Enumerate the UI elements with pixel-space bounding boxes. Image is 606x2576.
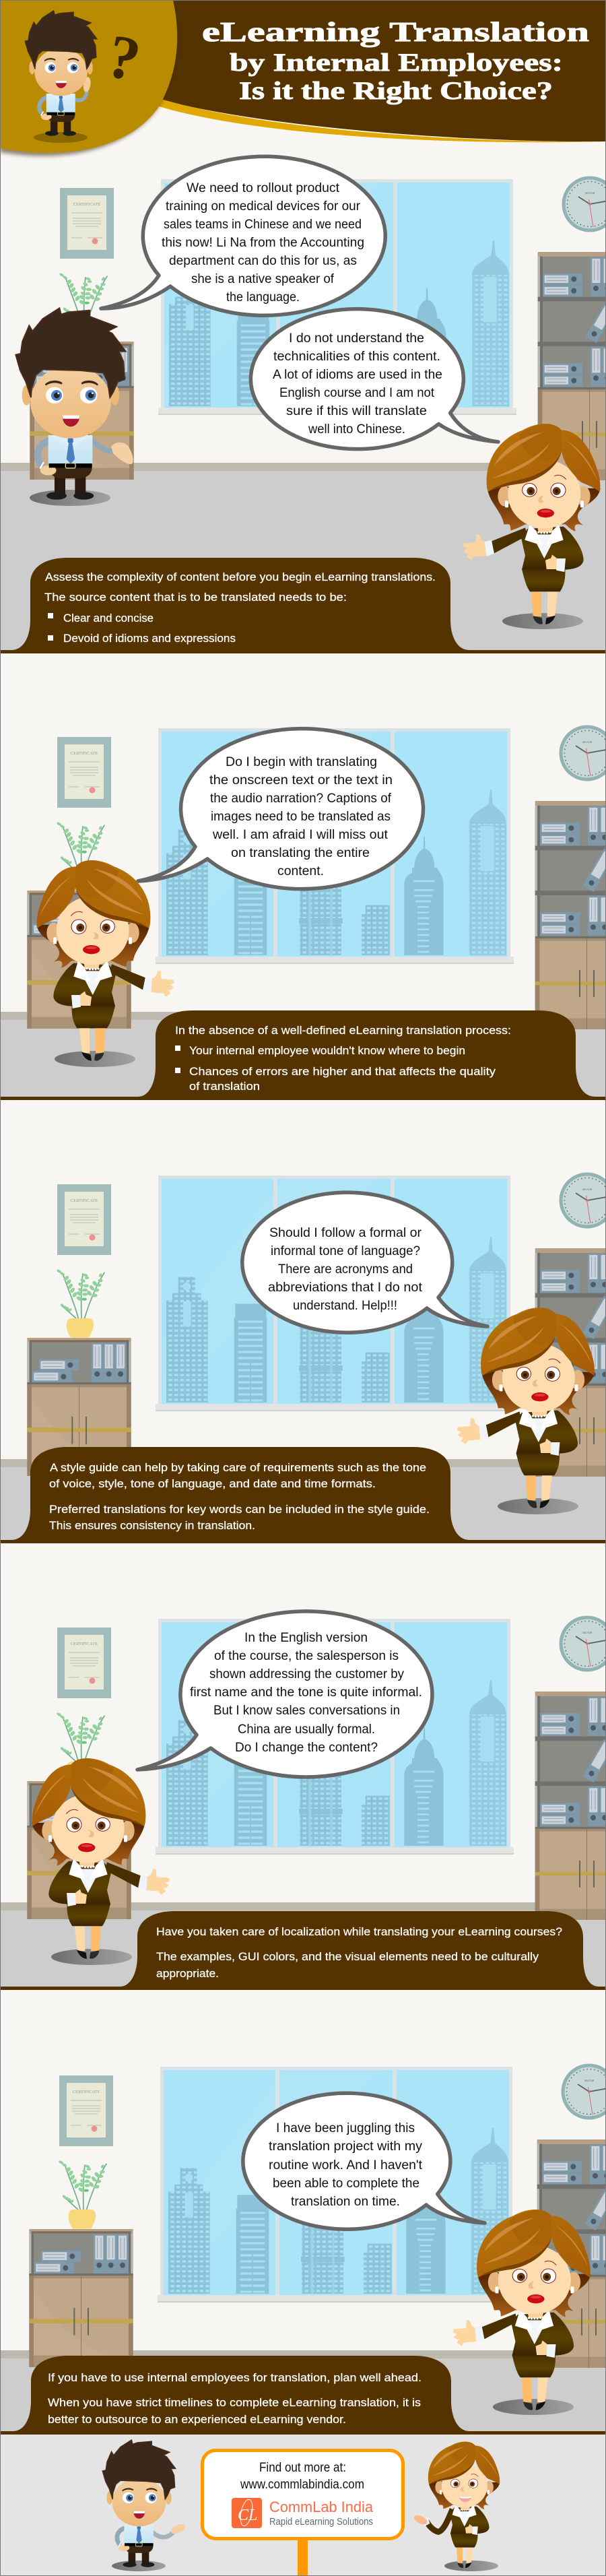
woman character [36, 860, 174, 1067]
speech bubble: technicalities: A lot of idioms are used in the [273, 368, 442, 382]
callout: style guide: of voice, style, tone of language, and date and time formats. [49, 1477, 376, 1490]
woman character [453, 2210, 591, 2415]
speech bubble: technicalities: sure if this will translate [286, 404, 427, 418]
speech bubble: English version: In the English version [244, 1631, 368, 1645]
speech bubble: tone of language: abbreviations that I do not [268, 1281, 423, 1295]
clock [562, 2064, 606, 2119]
brown title band [160, 0, 606, 141]
clock [559, 725, 606, 781]
callout: localization: appropriate. [156, 1967, 219, 1980]
clock [559, 1172, 606, 1229]
man character [102, 2440, 187, 2571]
speech bubble: technicalities: technicalities of this content. [273, 350, 440, 364]
floor [0, 2358, 606, 2431]
panel: complexity of content [0, 156, 606, 653]
speech bubble: English version: of the course, the salesperson is [214, 1649, 399, 1663]
clock [559, 1615, 606, 1672]
right cabinet [537, 2139, 606, 2368]
panel: style guide [0, 1172, 606, 1543]
woman character [32, 1758, 170, 1965]
callout: style guide: A style guide can help by taking care of requirements such as the tone [50, 1461, 426, 1474]
panel: localization [0, 1611, 606, 1990]
footer [0, 2435, 606, 2576]
speech bubble: where to begin: the onscreen text or the text in [209, 773, 393, 787]
speech bubble: English version: Do I change the content? [235, 1741, 378, 1755]
speech bubble: rollout request: the language. [226, 290, 300, 304]
floor [0, 1020, 606, 1097]
speech bubble: technicalities: I do not understand the [289, 331, 424, 346]
speech bubble: rollout request: this now! Li Na from the Accounting [162, 236, 364, 250]
speech bubble: rollout request: sales teams in Chinese and we need [164, 218, 362, 232]
plant [56, 1712, 104, 1781]
callout: plan ahead: If you have to use internal employees for translation, plan well ahead. [48, 2371, 422, 2384]
right cabinet [535, 1248, 606, 1477]
gold circle shadow [0, 5, 178, 156]
title [202, 16, 589, 105]
logo: CommLab India [269, 2499, 374, 2515]
footer background [0, 2435, 606, 2576]
logo: Rapid eLearning Solutions [269, 2516, 373, 2527]
floor [0, 1467, 606, 1540]
certificate [60, 188, 114, 259]
speech bubble: rollout request: she is a native speaker of [191, 272, 335, 286]
speech bubble: juggling work [243, 2093, 485, 2229]
speech bubble: where to begin: on translating the entire [231, 846, 370, 860]
plant [56, 1268, 104, 1338]
callout: localization [0, 1911, 606, 1990]
window [156, 728, 514, 964]
speech bubble: juggling work: been able to complete the [273, 2177, 419, 2191]
callout: assess complexity: Devoid of idioms and expressions [63, 632, 236, 645]
certificate [57, 737, 111, 808]
callout: process absence: In the absence of a well-defined eLearning translation process: [175, 1024, 511, 1037]
gold circle [0, 0, 177, 153]
title: by Internal Employees: [230, 49, 563, 77]
speech bubble: technicalities: well into Chinese. [308, 422, 405, 437]
wall skirting [0, 463, 606, 471]
speech bubble: tone of language: Should I follow a formal or [269, 1226, 422, 1240]
right cabinet [535, 801, 606, 1029]
callout: assess complexity: The source content that is to be translated needs to be: [44, 591, 347, 604]
panel: timelines [0, 2064, 606, 2435]
speech bubble: where to begin: content. [277, 864, 324, 878]
callout: process absence [0, 1010, 606, 1100]
floor [0, 1910, 606, 1987]
callout: process absence: Your internal employee wouldn't know where to begin [189, 1044, 465, 1057]
speech bubble: where to begin: Do I begin with translating [226, 755, 377, 769]
wall skirting [0, 1012, 606, 1020]
callout: plan ahead [0, 2356, 606, 2435]
right cabinet [535, 1692, 606, 1920]
left cabinet [29, 2229, 133, 2367]
speech bubble: juggling work: I have been juggling this [276, 2121, 415, 2135]
callout: localization: Have you taken care of localization while translating your eLearning courses? [156, 1925, 562, 1938]
woman character [463, 424, 601, 629]
speech bubble: rollout request [101, 156, 385, 315]
wall skirting [0, 1459, 606, 1467]
left cabinet [27, 891, 131, 1029]
speech bubble: where to begin: well. I am afraid I will miss out [212, 828, 389, 842]
callout: plan ahead: When you have strict timelines to complete eLearning translation, it is [48, 2396, 421, 2409]
callout: assess complexity: Assess the complexity of content before you begin eLearning translations. [45, 571, 436, 583]
callout: style guide [0, 1447, 606, 1543]
window [158, 2067, 516, 2303]
left cabinet [27, 1781, 131, 1919]
callout: process absence: of translation [189, 1080, 260, 1093]
man character [25, 11, 97, 143]
gold underline curve [159, 98, 606, 142]
plant [58, 2160, 106, 2229]
wall skirting [0, 1902, 606, 1910]
speech bubble: where to begin [138, 729, 424, 889]
left cabinet [27, 1338, 131, 1476]
woman character [457, 1308, 595, 1514]
speech bubble: technicalities: English course and I am not [279, 386, 435, 400]
signboard: Find out more at: [259, 2461, 346, 2475]
signboard: www.commlabindia.com [240, 2478, 364, 2492]
title: Is it the Right Choice? [239, 77, 553, 105]
right cabinet [538, 252, 606, 480]
callout: plan ahead: better to outsource to an experienced eLearning vendor. [48, 2413, 346, 2426]
speech bubble: English version: shown addressing the customer by [209, 1667, 404, 1681]
speech bubble: English version: China are usually formal. [238, 1722, 375, 1737]
certificate [59, 2075, 113, 2146]
speech bubble: tone of language: understand. Help!!! [293, 1299, 397, 1313]
clock [562, 176, 606, 232]
callout: style guide: Preferred translations for key words can be included in the style guide. [49, 1503, 430, 1516]
certificate [57, 1628, 111, 1698]
logo: CL [238, 2507, 257, 2524]
speech bubble: juggling work: translation project with my [269, 2139, 423, 2154]
callout: style guide: This ensures consistency in translation. [49, 1519, 255, 1532]
speech bubble: English version [137, 1611, 432, 1777]
left cabinet [30, 342, 134, 480]
speech bubble: juggling work: routine work. And I haven't [269, 2158, 423, 2172]
panel: translation process [0, 725, 606, 1100]
signboard [202, 2451, 403, 2576]
certificate [57, 1184, 111, 1255]
window [156, 1176, 514, 1411]
speech bubble: English version: first name and the tone is quite informal. [190, 1685, 422, 1700]
callout: process absence: Chances of errors are higher and that affects the quality [189, 1065, 496, 1078]
speech bubble: rollout request: We need to rollout product [187, 181, 340, 195]
floor [0, 471, 606, 650]
speech bubble: where to begin: images need to be translated as [211, 810, 391, 824]
window [156, 1619, 514, 1855]
callout: assess complexity [0, 558, 606, 653]
speech bubble: tone of language: informal tone of language? [271, 1244, 420, 1258]
callout: localization: The examples, GUI colors, and the visual elements need to be culturally [156, 1950, 539, 1963]
speech bubble: juggling work: translation on time. [291, 2195, 400, 2209]
plant [56, 821, 104, 891]
logo [232, 2498, 374, 2528]
header banner [0, 0, 606, 156]
plant [59, 272, 107, 342]
speech bubble: technicalities [250, 309, 498, 449]
icon: question mark: ? [102, 21, 146, 94]
speech bubble: tone of language [242, 1192, 487, 1332]
wall skirting [0, 2350, 606, 2358]
speech bubble: where to begin: the audio narration? Captions of [210, 792, 392, 806]
speech bubble: rollout request: department can do this for us, as [169, 254, 357, 268]
callout: assess complexity: Clear and concise [63, 612, 154, 624]
speech bubble: tone of language: There are acronyms and [278, 1262, 413, 1277]
speech bubble: rollout request: training on medical devices for our [166, 199, 361, 214]
window [158, 179, 516, 415]
man character [15, 308, 133, 506]
title: eLearning Translation [202, 16, 589, 47]
speech bubble: English version: But I know sales conversations in [213, 1704, 400, 1718]
woman character [413, 2441, 500, 2571]
